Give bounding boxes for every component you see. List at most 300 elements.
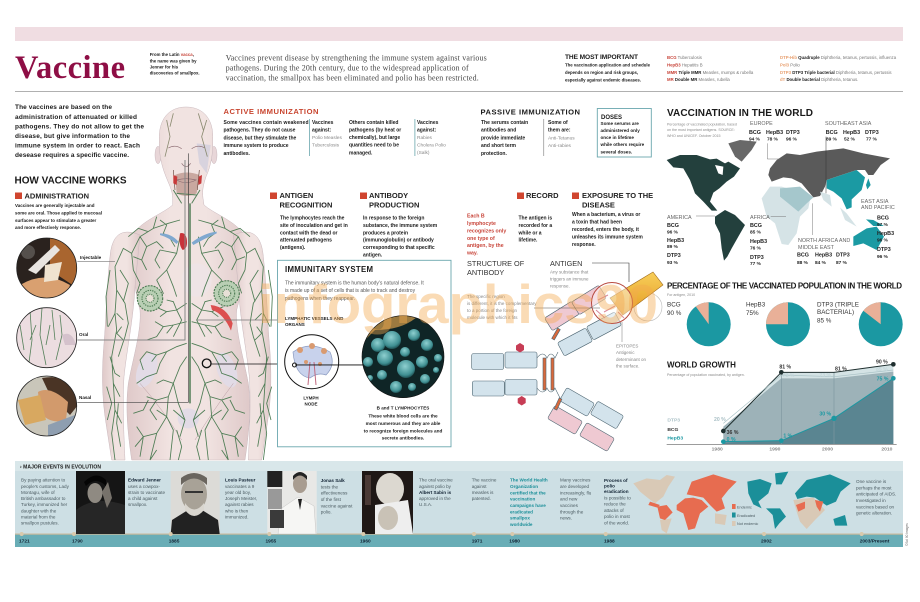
event 1955: tests the bbox=[321, 484, 339, 489]
value labels: 20 % bbox=[714, 417, 726, 423]
value labels: 36 % bbox=[727, 430, 739, 436]
polio map legend: Not endemic bbox=[737, 522, 758, 526]
passive immunization: antibodies and bbox=[481, 128, 516, 134]
step 1: administration: and more effectively response. bbox=[15, 225, 81, 230]
event 1971: measles is bbox=[472, 490, 494, 495]
step 3 bbox=[360, 191, 438, 258]
active immunization: Tuberculosis bbox=[312, 142, 340, 148]
event 2003: anticipated of AIDS. bbox=[856, 492, 896, 497]
event: new vaccines: are developed bbox=[560, 484, 590, 489]
region stats: East Asia and Pacific bbox=[861, 199, 895, 260]
polio map legend: Endemic bbox=[737, 506, 752, 510]
region stats: Africa: 76 % bbox=[750, 246, 762, 252]
value labels: 0 % bbox=[727, 437, 736, 443]
lymph node circle bbox=[284, 334, 365, 390]
active immunization: ACTIVE IMMUNIZATION bbox=[224, 107, 318, 116]
region stats: Europe bbox=[749, 121, 800, 143]
event 2003: genetic alteration. bbox=[856, 511, 892, 516]
series legend bbox=[667, 418, 683, 442]
event 1980: eradicated bbox=[510, 509, 533, 514]
doses box: Some serums are bbox=[600, 121, 639, 126]
event 1721: Montagu, wife of bbox=[21, 490, 55, 495]
event 1980: certified that the bbox=[510, 490, 546, 495]
step 4: recorded for a bbox=[518, 223, 552, 229]
active immunization: Vaccines bbox=[312, 120, 334, 126]
event 1885: who is then bbox=[225, 508, 249, 513]
lymphocytes caption: B and T LYMPHOCYTES bbox=[377, 406, 429, 410]
event 1980: smallpox bbox=[510, 516, 530, 521]
step 4: The antigen is bbox=[518, 216, 552, 222]
vaccine legend: DTP-Hib Quadruple Diphtheria, tetanus, pertussis, influenza bbox=[780, 55, 897, 60]
doses box: while others require bbox=[600, 142, 645, 147]
photo: Salk bbox=[267, 471, 317, 534]
vaccine legend: MMR Triple MMR Measles, mumps & rubella bbox=[667, 70, 754, 75]
how vaccine works heading: HOW VACCINE WORKS bbox=[14, 176, 127, 186]
active immunization bbox=[224, 107, 446, 157]
year axis: 1990 bbox=[769, 447, 781, 453]
region stats: Southeast Asia bbox=[825, 121, 879, 143]
value labels: 85 % bbox=[876, 367, 888, 373]
event 1790: smallpox. bbox=[128, 502, 147, 507]
world map note: on the most important antigens. SOURCE: bbox=[667, 128, 735, 132]
event 1980: The World Health bbox=[510, 478, 548, 483]
region stats: Europe: 96 % bbox=[786, 137, 798, 143]
region stats: East Asia and Pacific: AND PACIFIC bbox=[861, 205, 895, 211]
timeline years: 1960 bbox=[360, 538, 371, 544]
passive immunization: protection. bbox=[481, 151, 507, 157]
photo: Pasteur bbox=[171, 471, 220, 534]
active immunization: Some vaccines contain weakened bbox=[224, 120, 308, 126]
region stats: Southeast Asia: 89 % bbox=[826, 137, 838, 143]
event 1790: uses a cowpox- bbox=[128, 484, 160, 489]
pie: HepB3: 75% bbox=[746, 310, 759, 317]
timeline years: 1721 bbox=[19, 538, 30, 544]
immunitary system box: ORGANS bbox=[285, 322, 305, 327]
event 2003: One vaccine is bbox=[856, 479, 887, 484]
polio map legend: Eradicated bbox=[737, 514, 755, 518]
most important note: THE MOST IMPORTANT bbox=[565, 54, 638, 61]
event 1988: of the world. bbox=[604, 520, 629, 526]
active immunization: Others contain killed bbox=[349, 120, 398, 126]
red note on B lymphocytes: recognizes only bbox=[467, 228, 506, 234]
red note on B lymphocytes: lymphocyte bbox=[467, 221, 496, 227]
value labels: 81 % bbox=[835, 366, 847, 372]
watermark: infographics90 bbox=[258, 273, 658, 335]
region stats: East Asia and Pacific: 96 % bbox=[877, 254, 889, 260]
event 1988: Process of bbox=[604, 478, 628, 483]
doses box: DOSES bbox=[601, 115, 622, 121]
region stats: Southeast Asia: 52 % bbox=[844, 137, 856, 143]
image credit: ©Sol 90 Images bbox=[905, 523, 909, 546]
timeline years: 1971 bbox=[472, 538, 483, 544]
active immunization: immune system to produce bbox=[224, 143, 289, 149]
step 1: administration: Vaccines are generally injectable and bbox=[15, 203, 95, 208]
event: new vaccines: vaccines bbox=[560, 503, 579, 508]
event 1988: Is possible to bbox=[604, 496, 631, 500]
event 1988: polio in most bbox=[604, 514, 631, 519]
event: new vaccines: news. bbox=[560, 516, 572, 521]
red note on B lymphocytes: one type of bbox=[467, 236, 495, 242]
doses box bbox=[597, 108, 651, 157]
timeline years: 2002 bbox=[761, 538, 772, 544]
step 5: a toxin that had been bbox=[572, 220, 622, 226]
event 1955: of the first bbox=[321, 497, 342, 502]
pointer lines bbox=[77, 153, 283, 402]
immunitary system box: pathogens when they reappear. bbox=[285, 296, 355, 302]
event 1885: year old boy, bbox=[225, 490, 251, 495]
region stats: Africa: HepB3 bbox=[750, 239, 767, 245]
step 2: (antigens). bbox=[280, 245, 306, 251]
epitopes label: determinant on bbox=[616, 357, 647, 362]
body shading bbox=[132, 143, 242, 428]
event 1988: attacks of bbox=[604, 508, 624, 513]
event 1955: effectiveness bbox=[321, 491, 348, 496]
timeline years: 1790 bbox=[72, 538, 83, 544]
world growth heading bbox=[667, 361, 745, 377]
world map bbox=[667, 137, 890, 261]
pie: DTP3: DTP3 (TRIPLE bbox=[817, 302, 859, 308]
pie: BCG: BCG bbox=[667, 302, 681, 308]
polio map 1988 bbox=[633, 474, 737, 533]
timeline years: 1955 bbox=[266, 538, 277, 544]
introduction: vaccination, the smallpox has been eliminated and polio has been restricted. bbox=[226, 74, 479, 83]
immunitary system box: LYMPHATIC VESSELS AND bbox=[285, 316, 344, 321]
region stats: Southeast Asia: BCG bbox=[826, 130, 838, 136]
series legend: HepB3 bbox=[667, 436, 683, 442]
header band bbox=[15, 27, 903, 41]
passive immunization: Anti-rabies bbox=[548, 143, 572, 149]
active immunization: Rabies bbox=[417, 135, 433, 141]
intro paragraph: The vaccines are based on the bbox=[15, 104, 112, 111]
world growth heading: Percentage of population vaccinated, by antigen. bbox=[667, 373, 745, 377]
event: new vaccines: Many vaccines bbox=[560, 478, 591, 483]
active immunization: Vaccines bbox=[417, 120, 439, 126]
active immunization: against: bbox=[312, 128, 332, 134]
event 2003: vaccines based on bbox=[856, 504, 894, 509]
event 1955: polio. bbox=[321, 510, 332, 515]
region stats: East Asia and Pacific: 96 % bbox=[877, 238, 889, 244]
region stats: Europe: HepB3 bbox=[766, 130, 783, 136]
lymph node label: LYMPH bbox=[303, 396, 319, 400]
active immunization: Polio Measles bbox=[312, 135, 342, 141]
region stats: East Asia and Pacific: BCG bbox=[877, 216, 889, 222]
step 3: corresponding to that specific bbox=[363, 245, 435, 251]
introduction: pathogens. During the 20th century, due to the widespread application of bbox=[226, 64, 469, 73]
heart bbox=[180, 233, 187, 250]
event 1980: Organization bbox=[510, 484, 538, 489]
event 1988: polio bbox=[604, 484, 615, 488]
region stats: Africa: 85 % bbox=[750, 230, 762, 236]
step 3: (immunoglobulin) or antibody bbox=[363, 238, 434, 244]
region stats: America: BCG bbox=[667, 223, 679, 229]
pie: HepB3: HepB3 bbox=[746, 302, 766, 308]
pie: DTP3: BACTERIAL) bbox=[817, 309, 854, 316]
active immunization: managed. bbox=[349, 150, 373, 156]
active immunization: pathogens. They do not cause bbox=[224, 128, 296, 134]
passive immunization: Some of bbox=[548, 120, 568, 126]
event: new vaccines: increasingly, flu bbox=[560, 490, 592, 495]
immunitary system box: IMMUNITARY SYSTEM bbox=[285, 265, 373, 274]
epitopes label: EPITOPES bbox=[616, 344, 638, 348]
pie: DTP3 bbox=[817, 302, 903, 346]
step 5: unleashes its immune system bbox=[572, 235, 643, 241]
step 3: ANTIBODY bbox=[369, 191, 408, 200]
event 1960: against polio by bbox=[419, 484, 452, 489]
polio map 2002 bbox=[747, 472, 851, 529]
region stats: Southeast Asia: HepB3 bbox=[843, 130, 860, 136]
region stats: North Africa and Middle East: BCG bbox=[797, 252, 809, 258]
intro paragraph: pathogens. They do not allow to get the bbox=[15, 124, 144, 130]
immunitary system box: The immunitary system is the human body's natural defense. It bbox=[285, 280, 424, 286]
lymphocytes caption bbox=[364, 406, 442, 441]
step 3: antigen. bbox=[363, 252, 383, 258]
region stats: America: 89 % bbox=[667, 244, 679, 250]
value labels: 75 % bbox=[877, 376, 889, 382]
region stats: East Asia and Pacific: 97 % bbox=[877, 222, 889, 228]
spleen bbox=[211, 305, 233, 331]
event 1790: strain to vaccinate bbox=[128, 490, 165, 495]
etymology note: discoveries of smallpox. bbox=[150, 71, 200, 76]
value labels: 90 % bbox=[876, 359, 888, 365]
world map note: WHO and UNICEF. October 2015 bbox=[667, 134, 721, 138]
event 1721: By paying attention to bbox=[21, 478, 66, 483]
step 5 bbox=[572, 191, 653, 248]
event 1971: patented. bbox=[472, 496, 491, 501]
region stats: North Africa and Middle East: NORTH AFRICA AND bbox=[798, 238, 850, 244]
event 1980: worldwide bbox=[509, 522, 533, 527]
doses box: administered only bbox=[600, 128, 640, 133]
step 5: response. bbox=[572, 242, 596, 248]
most important note: The vaccination application and schedule bbox=[565, 63, 651, 68]
step 3: produces a protein bbox=[363, 230, 408, 236]
step 2: contact with the dead or bbox=[280, 230, 338, 236]
etymology note: From the Latin vacca, bbox=[150, 52, 194, 57]
value labels: 73 % bbox=[819, 373, 831, 379]
step 5: recorded, enters the body, it bbox=[572, 227, 639, 233]
event: new vaccines: and new bbox=[560, 497, 578, 502]
introduction: Vaccines prevent disease by strengthening the immune system against various bbox=[226, 54, 487, 63]
event 1960: Albert Sabin is bbox=[419, 490, 452, 495]
step 4: lifetime. bbox=[518, 238, 538, 244]
region stats: East Asia and Pacific: EAST ASIA bbox=[861, 199, 889, 205]
vaccine legend: Pol3 Polio bbox=[780, 62, 800, 68]
active immunization: quantities need to be bbox=[349, 143, 399, 149]
region stats: America: 93 % bbox=[667, 260, 679, 266]
variable region note: molecule with which it fits bbox=[467, 315, 518, 320]
event 1960: approved in the bbox=[419, 496, 451, 501]
active immunization: against: bbox=[417, 128, 437, 134]
most important note: depends on region and risk groups, bbox=[565, 70, 638, 75]
event 1721: material from the bbox=[21, 514, 56, 520]
event 1980: campaigns have bbox=[510, 503, 546, 508]
step 2: site of inoculation and get in bbox=[280, 223, 348, 229]
step 1: administration: surfaces appear to stimulate a greater bbox=[15, 218, 97, 223]
most important note bbox=[565, 54, 651, 82]
red note on B lymphocytes: Each B bbox=[467, 214, 485, 220]
region stats: Africa: DTP3 bbox=[750, 255, 764, 261]
active immunization: antibodies. bbox=[224, 151, 251, 157]
lymphocytes caption: most numerous and they are able bbox=[366, 421, 441, 426]
intro paragraph: administration of attenuated or killed bbox=[15, 114, 137, 121]
human body lymphatic illustration bbox=[77, 107, 283, 460]
region stats: America: 96 % bbox=[667, 230, 679, 236]
passive immunization: Anti-Tetanus bbox=[548, 135, 575, 141]
value labels: 73 % bbox=[783, 373, 795, 379]
lymphocytes caption: These white blood cells are the bbox=[368, 414, 438, 418]
lymph vessels bbox=[106, 203, 272, 460]
region stats: Europe: BCG bbox=[749, 130, 761, 136]
value labels: 81 % bbox=[779, 365, 792, 371]
region stats: North Africa and Middle East: HepB3 bbox=[815, 252, 832, 258]
event 1885: against rabies bbox=[225, 502, 254, 507]
region stats: Europe: DTP3 bbox=[786, 130, 800, 136]
step 5: When a bacterium, a virus or bbox=[572, 212, 640, 218]
timeline years: 2003/Present bbox=[860, 538, 890, 544]
event 2003: perhaps the most bbox=[856, 485, 892, 490]
antigen label bbox=[550, 259, 629, 288]
vaccine legend bbox=[667, 55, 897, 82]
variable region note: to a portion of the foreign bbox=[467, 308, 518, 313]
nasal label: Nasal bbox=[79, 395, 91, 400]
epitopes label bbox=[616, 322, 647, 368]
event 1980: vaccination bbox=[510, 497, 535, 502]
vaccine legend: MR Double MR Measles, rubella bbox=[667, 77, 730, 82]
step 3: In response to the foreign bbox=[363, 216, 424, 222]
event 1885: Joseph Meister, bbox=[225, 496, 257, 501]
year axis: 1980 bbox=[712, 447, 723, 453]
etymology note: the name was given by bbox=[150, 58, 197, 63]
facial features bbox=[165, 113, 207, 203]
event 1721: daughter with the bbox=[21, 508, 57, 513]
doses box: once in lifetime bbox=[600, 135, 634, 140]
region stats: Europe: 78 % bbox=[767, 137, 779, 143]
event 1790: a child against bbox=[128, 496, 158, 501]
region stats: North Africa and Middle East: 84 % bbox=[815, 260, 827, 266]
passive immunization: them are: bbox=[548, 128, 571, 134]
etymology note: Jenner for his bbox=[150, 64, 179, 70]
region stats: East Asia and Pacific: DTP3 bbox=[877, 247, 891, 253]
year axis: 2010 bbox=[881, 447, 893, 453]
oral label: Oral bbox=[79, 332, 88, 337]
polio map legend bbox=[732, 504, 758, 526]
region stats: North Africa and Middle East: MIDDLE EAST bbox=[798, 245, 835, 251]
epitopes label: Antigenic bbox=[616, 350, 635, 355]
region stats: Africa: 77 % bbox=[750, 261, 762, 267]
active immunization: Cholera Polio bbox=[417, 142, 446, 148]
event: new vaccines: through the bbox=[560, 509, 584, 514]
vaccine legend: BCG Tuberculosis bbox=[667, 55, 702, 60]
antibody diagram bbox=[472, 285, 624, 451]
active immunization: disease, but they stimulate the bbox=[224, 135, 297, 141]
photo: oral polio vaccine bbox=[362, 471, 413, 534]
immunitary system box bbox=[278, 260, 451, 447]
lymphocytes caption: secrete antibodies. bbox=[382, 436, 424, 441]
value labels: 30 % bbox=[819, 411, 831, 417]
variable region note: The specific region bbox=[467, 294, 505, 299]
year axis: 2000 bbox=[822, 447, 833, 453]
antigen label: Any substance that bbox=[550, 270, 589, 274]
step 2 bbox=[270, 191, 348, 251]
region stats: East Asia and Pacific: HepB3 bbox=[877, 231, 894, 237]
intro paragraph: immune system in order to react. Each bbox=[15, 143, 140, 150]
most important note: especially against endemic diseases. bbox=[565, 78, 641, 82]
antigen label: response. bbox=[550, 284, 570, 288]
region stats: America: HepB3 bbox=[667, 238, 684, 244]
red note on B lymphocytes: antigen, by the bbox=[467, 243, 504, 249]
timeline heading: › MAJOR EVENTS IN EVOLUTION bbox=[20, 464, 101, 470]
oral mucosa photo bbox=[17, 308, 76, 368]
passive immunization bbox=[480, 107, 580, 157]
event 1885: vaccinates a 9 bbox=[225, 484, 255, 489]
pie: BCG: 90 % bbox=[667, 310, 682, 317]
intro paragraph: desease requires a specific vaccine. bbox=[15, 152, 129, 159]
world map note: Percentage of vaccinated population, based bbox=[667, 123, 737, 127]
injectable label: Injectable bbox=[80, 255, 102, 260]
world growth area chart bbox=[667, 359, 897, 453]
region stats: America: AMERICA bbox=[667, 215, 692, 221]
passive immunization: PASSIVE IMMUNIZATION bbox=[480, 107, 580, 116]
event 1988: reduce the bbox=[604, 502, 626, 507]
world growth heading: WORLD GROWTH bbox=[667, 361, 736, 370]
vaccinated population heading: PERCENTAGE OF THE VACCINATED POPULATION IN THE WORLD bbox=[667, 281, 902, 290]
red note on B lymphocytes: way. bbox=[466, 250, 478, 256]
passive immunization: provide immediate bbox=[481, 135, 525, 141]
step 1: administration: some are oral. Those applied to mucosal bbox=[15, 210, 102, 216]
immunitary system box: is made up of a set of cells that is able to track and destroy bbox=[285, 288, 416, 294]
passive immunization: and short term bbox=[481, 143, 517, 149]
event 1885: immunized. bbox=[225, 514, 248, 520]
step 5: EXPOSURE TO THE bbox=[582, 191, 653, 200]
vaccination in the world heading: VACCINATION IN THE WORLD bbox=[667, 108, 813, 119]
region stats: Europe: 94 % bbox=[749, 137, 761, 143]
vaccinated population heading: For antigen, 2010 bbox=[667, 293, 695, 297]
intro paragraph: disease, but give information to the bbox=[15, 133, 130, 140]
step 2: RECOGNITION bbox=[280, 200, 332, 210]
vaccinated population heading bbox=[667, 281, 902, 297]
step 2: The lymphocytes reach the bbox=[280, 216, 345, 222]
event 1960: U.S.A. bbox=[419, 502, 432, 507]
step 2: ANTIGEN bbox=[280, 191, 313, 200]
photo: Jenner bbox=[76, 471, 125, 534]
region stats: Europe: EUROPE bbox=[750, 121, 773, 127]
region stats: Southeast Asia: 77 % bbox=[866, 137, 878, 143]
passive immunization: The serums contain bbox=[481, 120, 528, 126]
event 1960: The oral vaccine bbox=[419, 478, 453, 483]
nasal photo bbox=[17, 376, 76, 436]
step 4 bbox=[517, 191, 559, 244]
vaccine legend: HepB3 Hepatitis B bbox=[667, 62, 703, 68]
region stats: North Africa and Middle East bbox=[797, 238, 850, 266]
step 2: attenuated pathogens bbox=[280, 238, 332, 244]
active immunization: pathogens (by heat or bbox=[349, 128, 401, 134]
pointer to variable region bbox=[534, 307, 600, 309]
region stats: North Africa and Middle East: 87 % bbox=[836, 260, 848, 266]
epitopes label: the surface. bbox=[616, 364, 640, 368]
antibody structure heading: STRUCTURE OF bbox=[467, 259, 525, 268]
region stats: Southeast Asia: SOUTHEAST ASIA bbox=[825, 121, 872, 127]
injection photo bbox=[17, 238, 76, 298]
timeline years: 1885 bbox=[169, 538, 180, 544]
event 1885: Louis Pasteur bbox=[225, 478, 256, 483]
event 1971: The vaccine bbox=[472, 478, 497, 483]
region stats: Southeast Asia: DTP3 bbox=[865, 130, 879, 136]
step 1: administration: ADMINISTRATION bbox=[24, 192, 89, 201]
title: Vaccine bbox=[15, 50, 125, 86]
pie: HepB3 bbox=[746, 302, 810, 346]
vaccine legend: DTP3 DTP3 Triple bacterial Diphtheria, tetanus, pertussis bbox=[780, 70, 892, 75]
event 1790: Edward Jenner bbox=[128, 478, 161, 483]
value labels bbox=[714, 359, 889, 443]
